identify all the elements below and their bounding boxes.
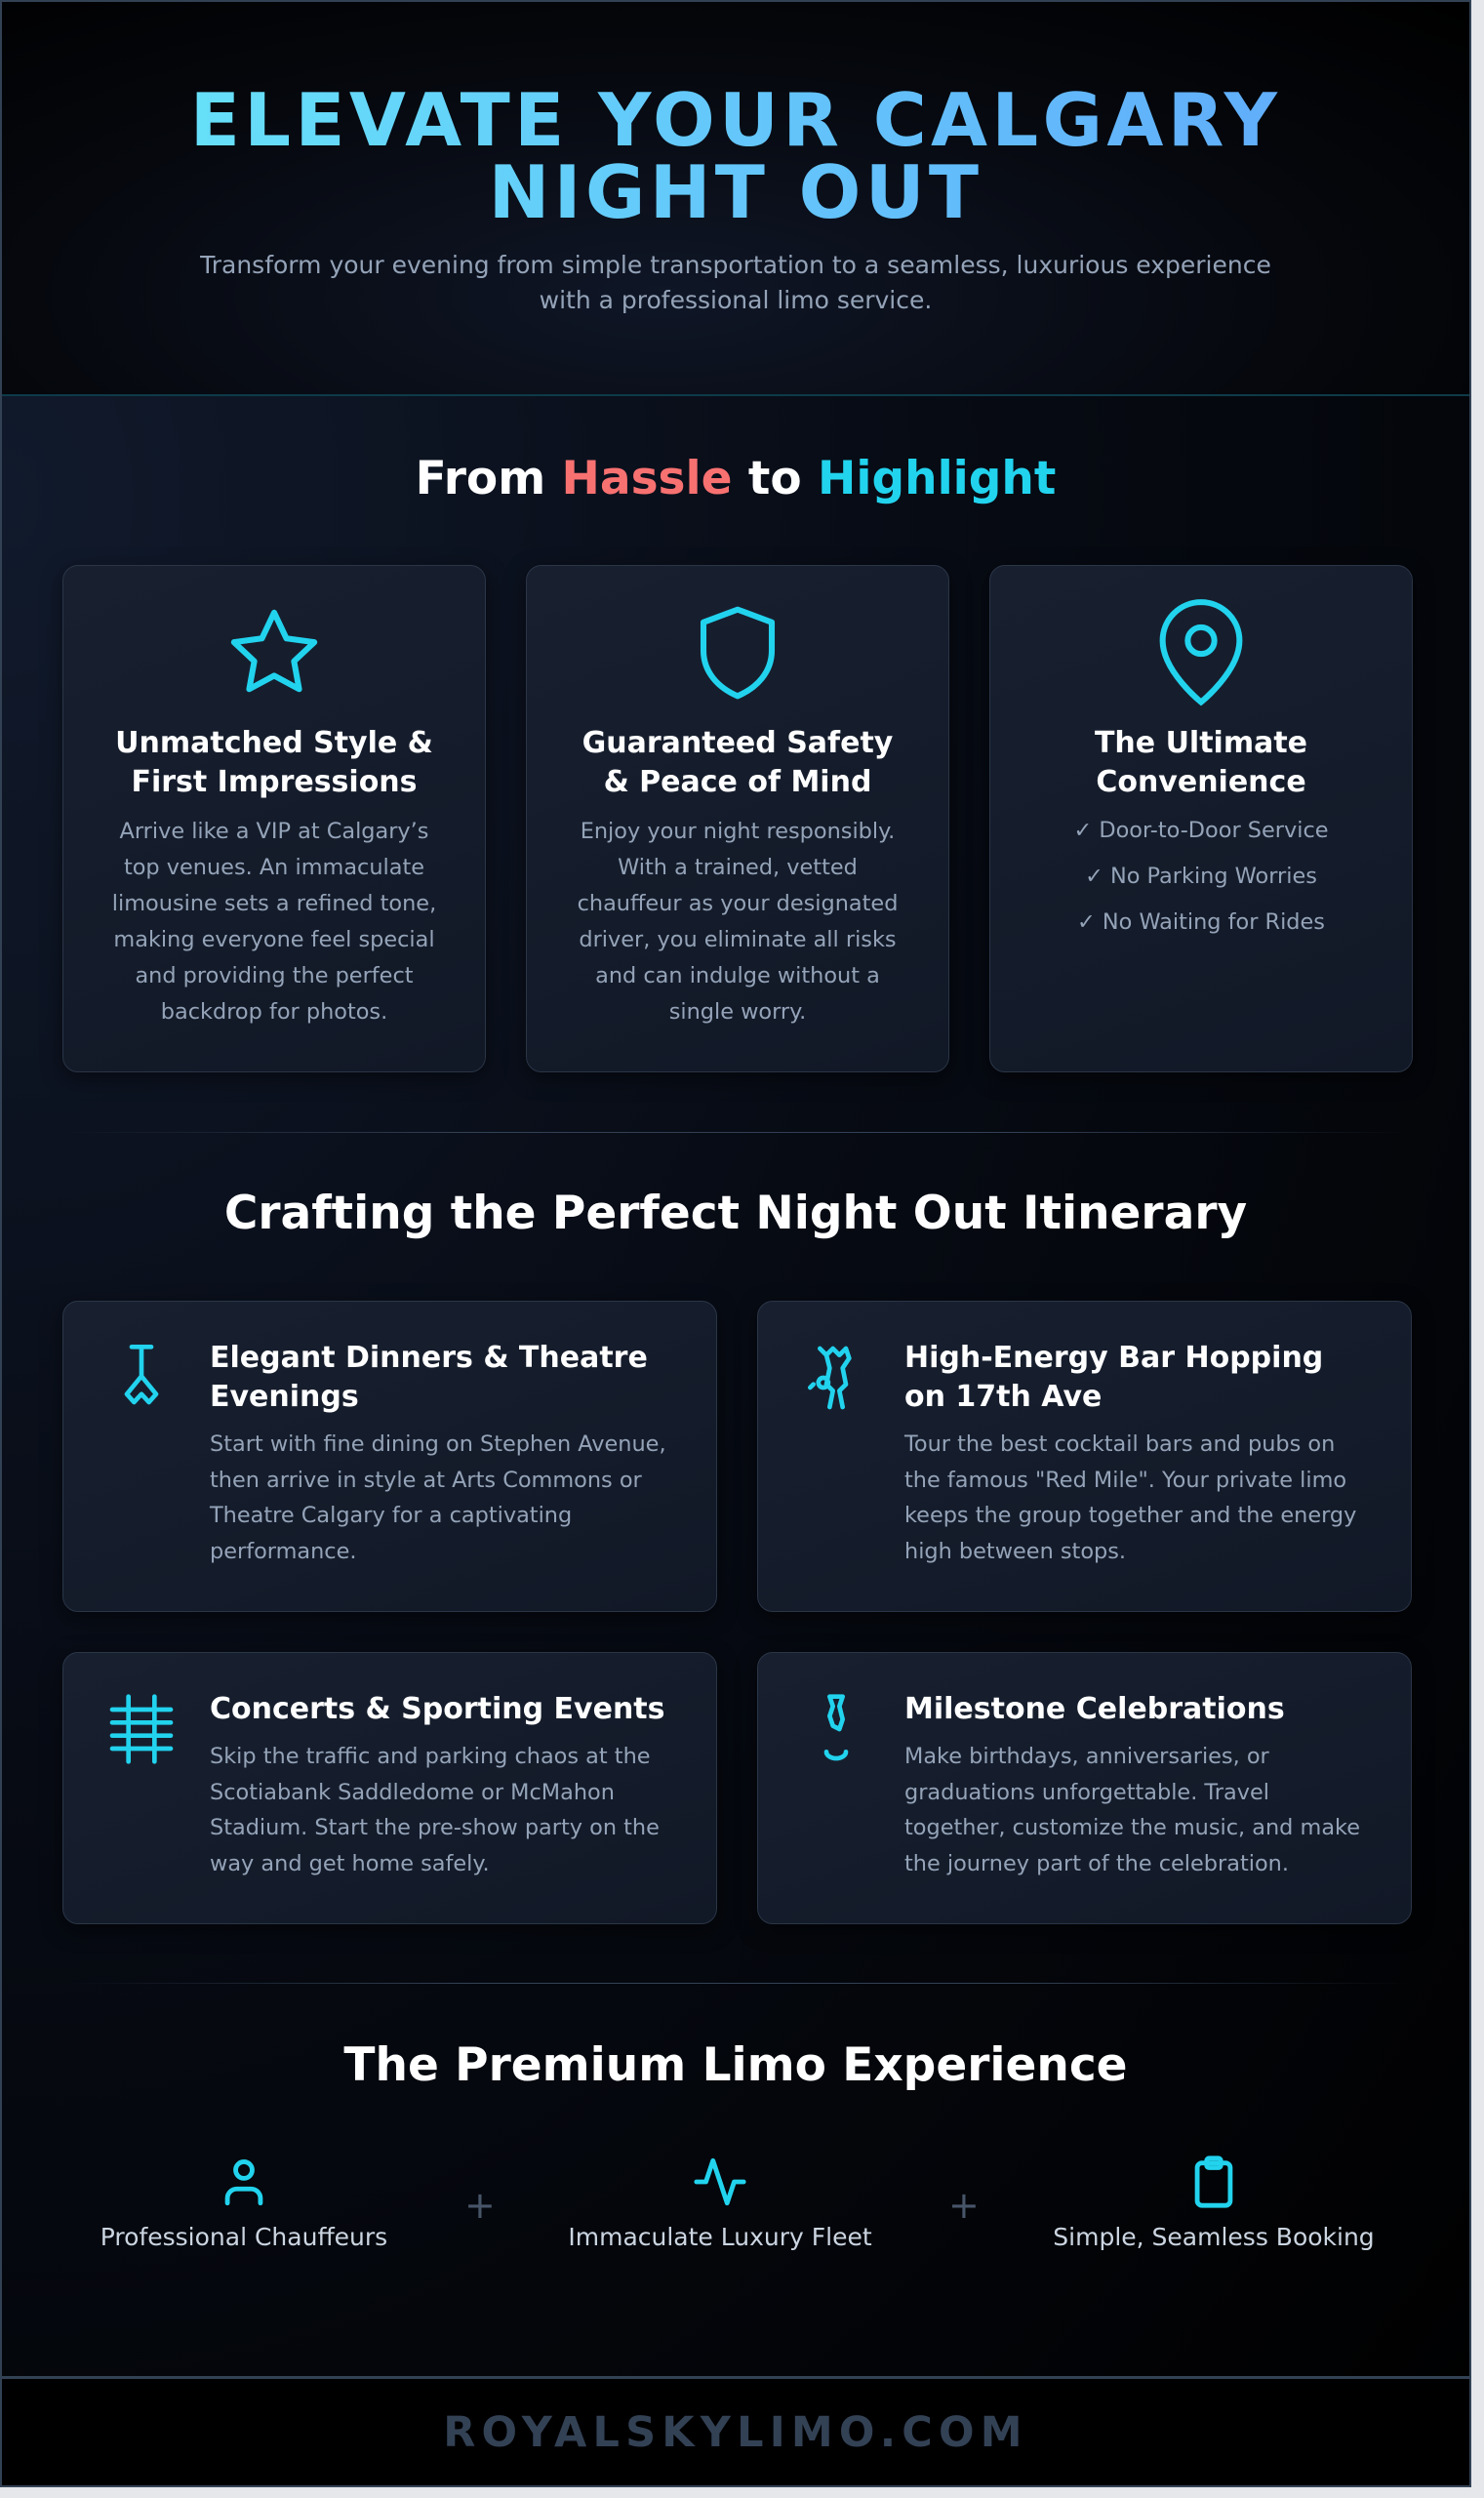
subtitle (200, 251, 1271, 314)
text: milestones: Milestone Celebrations (904, 1692, 1285, 1726)
heading: itinerary: Crafting the Perfect Night Out Itinerary (224, 1187, 1247, 1240)
text: safety: Guaranteed Safety (582, 726, 893, 760)
panel: milestones (757, 1652, 1412, 1924)
text: style (112, 726, 436, 1025)
footer (2, 2376, 1469, 2487)
text: safety: Enjoy your night responsibly. With a trained, vetted chauffeur as your designated driver, you eliminate all risks and can indulge without a single worry. (578, 819, 898, 1025)
heading: premium experience: The Premium Limo Experience (343, 2038, 1128, 2092)
icon: star (230, 609, 318, 693)
text: concerts: Concerts & Sporting Events (210, 1692, 665, 1726)
text: milestones: Make birthdays, anniversaries, or graduations unforgettable. Travel together, customize the music, and make the journey part of the celebration. (904, 1744, 1360, 1875)
heading: from hassle to highlight: From Hassle to Highlight (416, 452, 1056, 505)
panel: dinners (62, 1301, 717, 1612)
header (2, 2, 1469, 396)
icon: location pin (1159, 599, 1243, 706)
text: concerts: Skip the traffic and parking chaos at the Scotiabank Saddledome or McMahon Stadium. Start the pre-show party on the way and get home safely. (210, 1744, 660, 1875)
title: ELEVATE YOUR CALGARY (190, 77, 1281, 163)
text: bar hopping (903, 1341, 1356, 1563)
text: bar hopping: Tour the best cocktail bars and pubs on the famous "Red Mile". Your private limo keeps the group together and the energy high between stops. (904, 1431, 1356, 1563)
panel: safety (526, 565, 949, 1072)
text: dinners: Start with fine dining on Stephen Avenue, then arrive in style at Arts Commons or Theatre Calgary for a captivating performance. (210, 1431, 666, 1563)
panel: bar hopping (757, 1301, 1412, 1612)
icon: grid (109, 1694, 174, 1764)
feature: fleet: Immaculate Luxury Fleet (568, 2223, 872, 2251)
text: convenience: Convenience (1096, 765, 1306, 799)
icon: cocktail (808, 1347, 852, 1409)
title (2, 84, 1469, 228)
text: convenience: ✓ No Parking Worries (1085, 864, 1317, 889)
subtitle: with a professional limo service. (540, 286, 932, 314)
panel: convenience (989, 565, 1413, 1072)
text: style: Unmatched Style & (115, 726, 433, 760)
icon: pulse (694, 2158, 746, 2205)
text: dinners (209, 1341, 666, 1563)
text: safety (578, 726, 898, 1025)
footer: ROYALSKYLIMO.COM (443, 2408, 1028, 2457)
icon: glass (125, 1345, 158, 1405)
feature: chauffeurs (100, 2159, 387, 2251)
title: NIGHT OUT (489, 149, 983, 235)
icon: clipboard (1194, 2156, 1233, 2208)
plus: + (464, 2184, 496, 2227)
panel: style (62, 565, 486, 1072)
feature: booking: Simple, Seamless Booking (1053, 2223, 1375, 2251)
text: convenience: ✓ No Waiting for Rides (1077, 909, 1325, 935)
text: bar hopping: High-Energy Bar Hopping on 17th Ave (904, 1341, 1323, 1414)
feature: fleet (568, 2158, 872, 2251)
icon: celebration (823, 1694, 849, 1760)
text: dinners: Elegant Dinners & Theatre Evenings (210, 1341, 648, 1414)
panel: concerts (62, 1652, 717, 1924)
text: style: First Impressions (131, 765, 418, 799)
text: style: Arrive like a VIP at Calgary’s top venues. An immaculate limousine sets a refined tone, making everyone feel special and providing the perfect backdrop for photos. (112, 819, 436, 1025)
text: convenience: The Ultimate (1095, 726, 1307, 760)
icon: shield (701, 607, 775, 699)
feature: chauffeurs: Professional Chauffeurs (100, 2223, 387, 2251)
plus: + (948, 2184, 980, 2227)
feature: booking (1053, 2156, 1375, 2251)
text: safety: & Peace of Mind (604, 765, 871, 799)
icon: person (224, 2159, 263, 2205)
text: convenience (1073, 726, 1329, 935)
subtitle: Transform your evening from simple transportation to a seamless, luxurious experience (200, 251, 1271, 279)
text: convenience: ✓ Door-to-Door Service (1073, 818, 1329, 843)
